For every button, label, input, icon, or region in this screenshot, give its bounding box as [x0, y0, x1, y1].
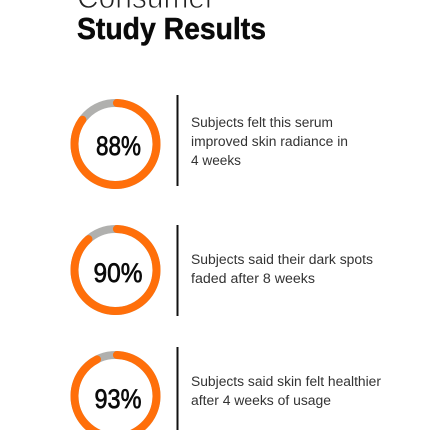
text block: [191, 115, 348, 168]
panel: 88% result: [73, 95, 348, 186]
text block: Subjects felt this serum: [191, 115, 333, 130]
text block: after 4 weeks of usage: [191, 393, 331, 408]
panel: 90% result: [73, 225, 373, 316]
donut chart: 93%: [73, 354, 158, 430]
text block: Subjects said their dark spots: [191, 252, 373, 267]
donut chart: 88%: [73, 102, 158, 186]
stat: 90%: 90%: [94, 258, 142, 288]
title: Study Results: [77, 11, 266, 46]
divider: [176, 347, 178, 430]
text block: faded after 8 weeks: [191, 271, 315, 286]
divider: [176, 95, 178, 186]
stat: 88%: 88%: [96, 131, 141, 161]
text block: [191, 252, 373, 286]
text block: [191, 374, 382, 408]
text block: Subjects said skin felt healthier: [191, 374, 382, 389]
divider: [176, 225, 178, 316]
stat: 93%: 93%: [94, 384, 142, 414]
panel: 93% result: [73, 347, 382, 430]
text block: 4 weeks: [191, 153, 241, 168]
text block: improved skin radiance in: [191, 134, 348, 149]
donut chart: 90%: [73, 228, 158, 312]
